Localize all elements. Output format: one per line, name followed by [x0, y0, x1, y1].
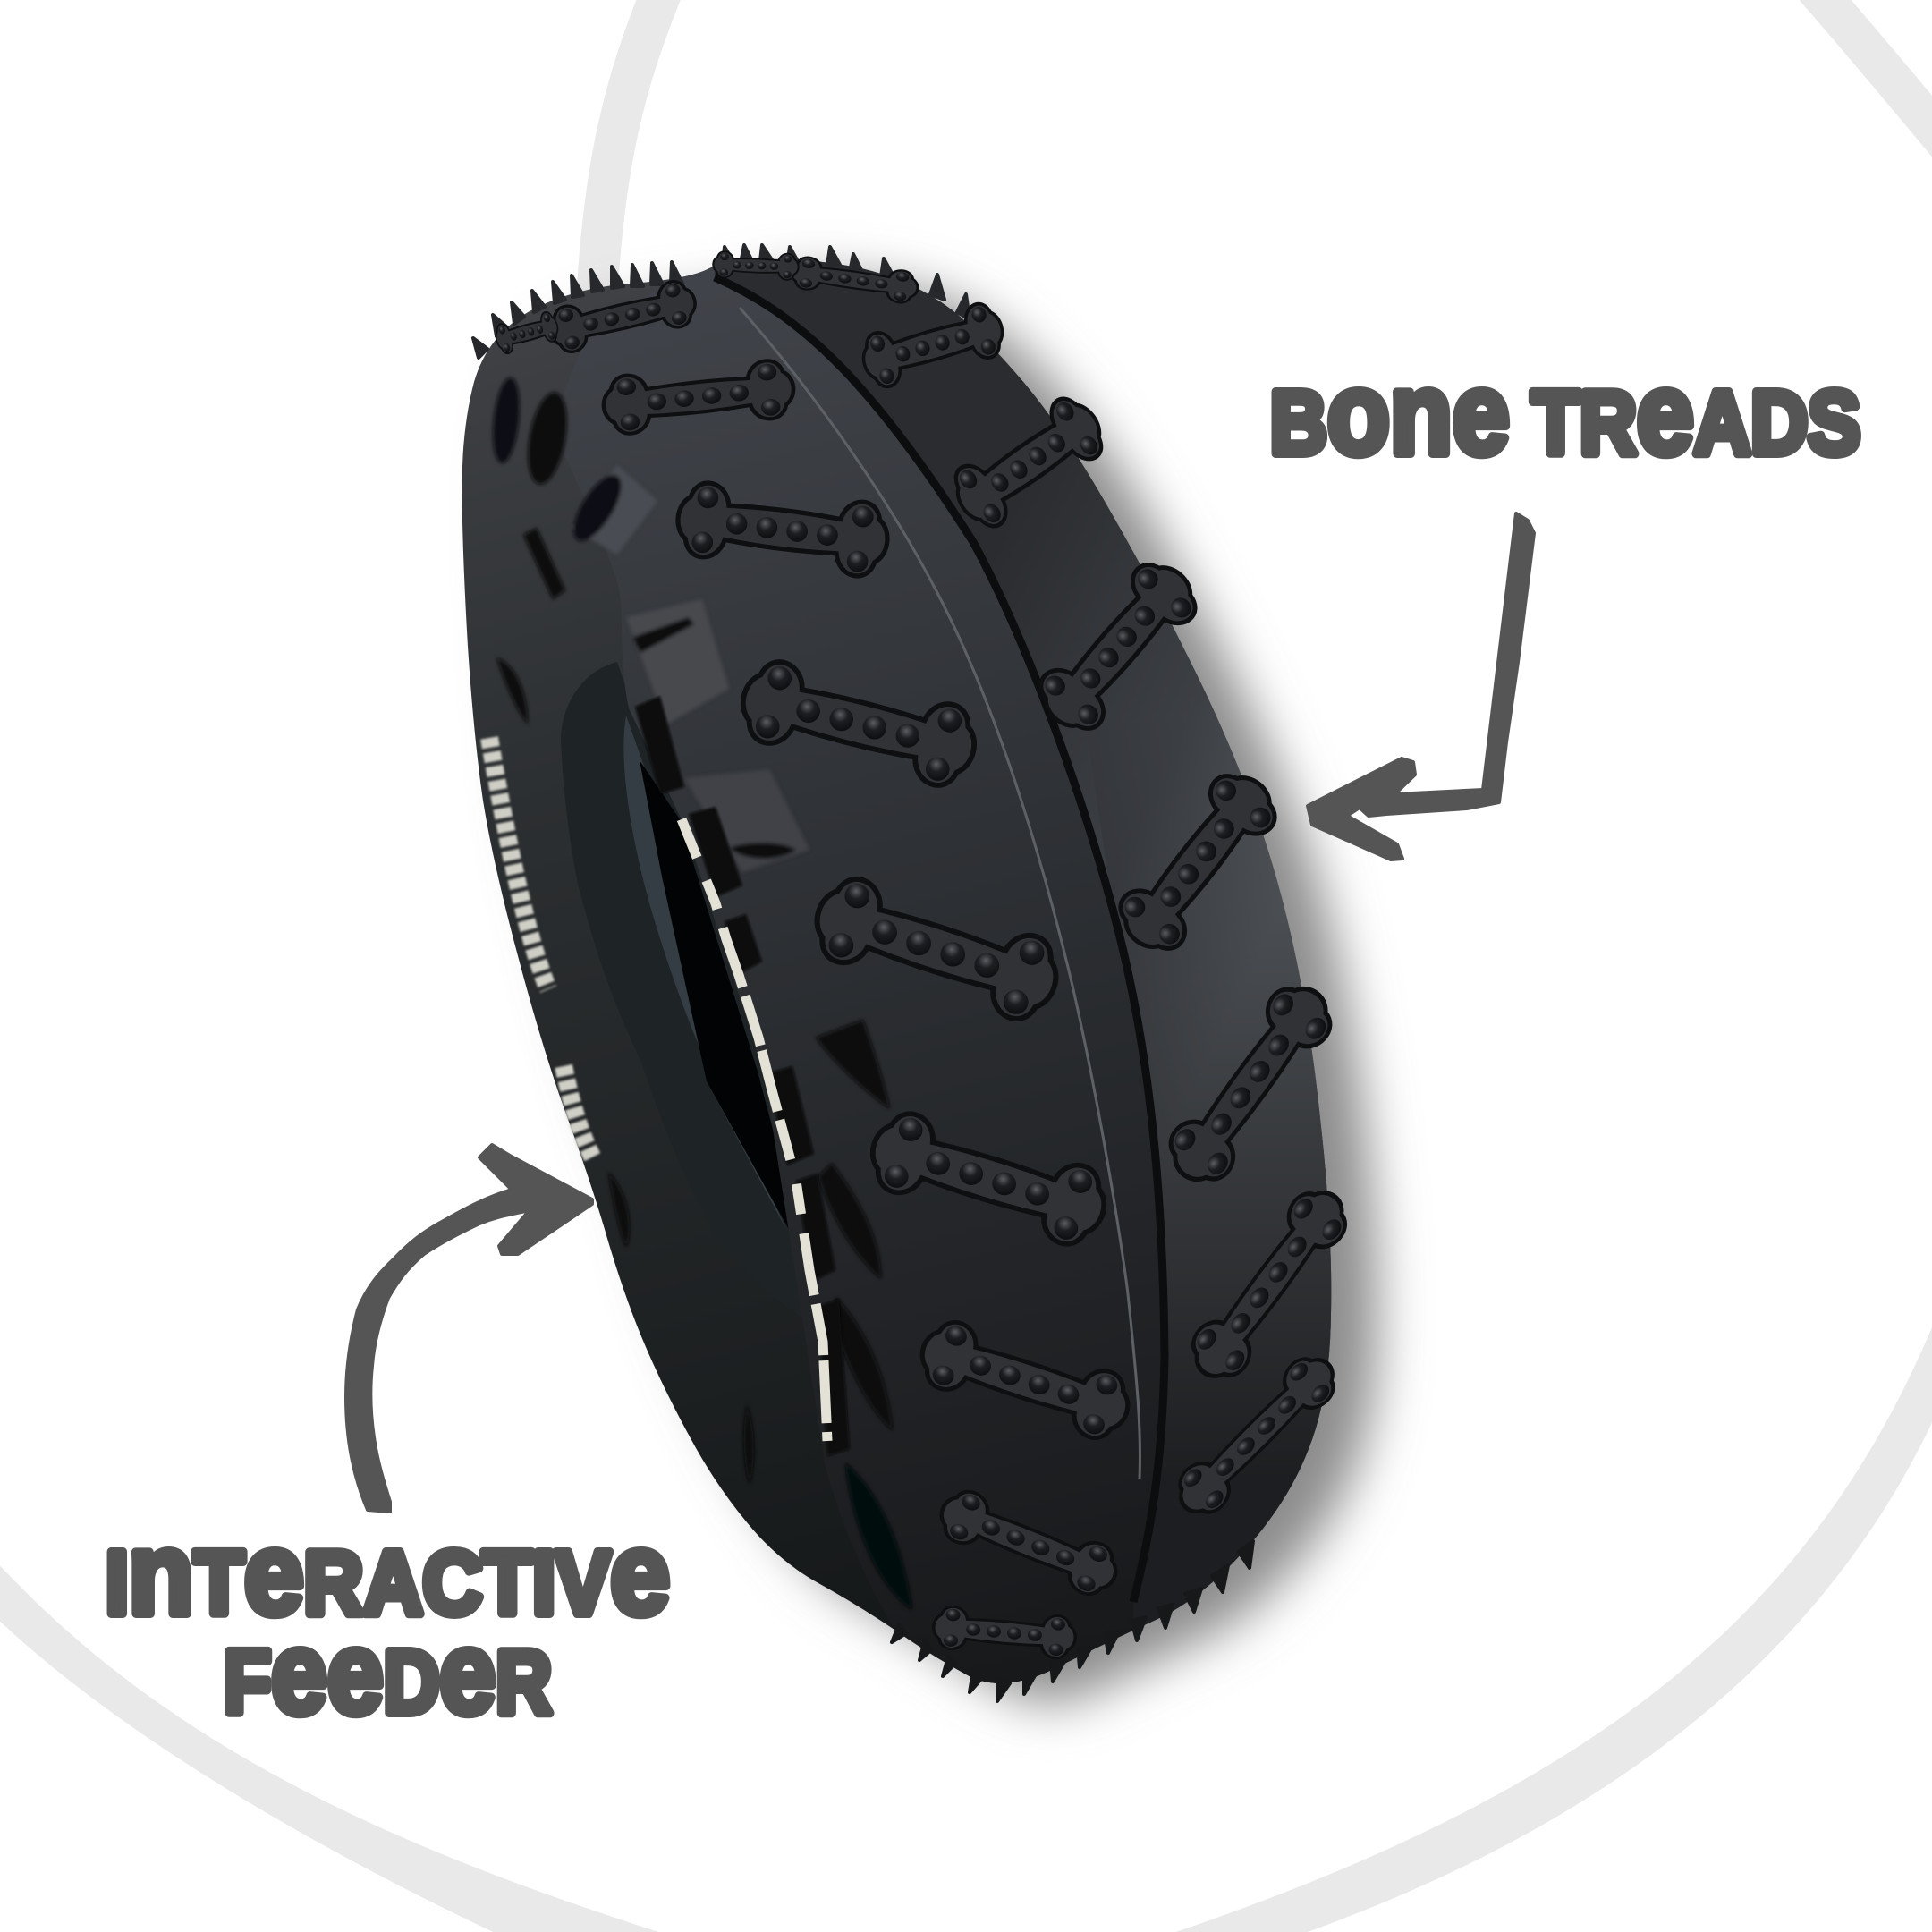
middle tread surface — [624, 268, 1132, 1683]
edge spikes bottom — [892, 1541, 1253, 1701]
label: Interactive Feeder — [106, 1508, 670, 1738]
bone treads outer row — [857, 299, 1358, 1525]
thin mould line — [740, 308, 1140, 1479]
hub rim highlight — [623, 716, 787, 1231]
edge spikes top left — [473, 262, 682, 358]
hub recess ring — [561, 662, 748, 1045]
arrow: Interactive Feeder pointer — [346, 1145, 592, 1512]
lower band shading — [1109, 834, 1331, 1625]
bone treads along top edge — [493, 251, 919, 356]
sidewall slots and blocks — [489, 377, 912, 1610]
label line one: InTeRACTIVe — [106, 1508, 670, 1639]
outer tread band — [715, 259, 1331, 1624]
label line two: FeeDeR — [224, 1607, 552, 1738]
rim dark blocks — [635, 696, 850, 1456]
label: Bone Treads: Bone TReADS — [1270, 348, 1860, 479]
hub opening — [640, 760, 789, 1229]
sidewall white lettering — [489, 738, 593, 1158]
tire product photo — [462, 242, 1395, 1701]
arrow: Bone Treads pointer — [1308, 513, 1534, 860]
clipped tire surfaces — [561, 259, 1331, 1683]
rim white lettering strip — [682, 819, 827, 1441]
bone treads middle row — [601, 358, 1137, 1659]
centre groove — [715, 277, 1165, 1602]
tire sidewall silhouette — [462, 259, 1331, 1683]
tire drop shadow — [508, 279, 1377, 1703]
edge spikes top right — [723, 245, 992, 342]
